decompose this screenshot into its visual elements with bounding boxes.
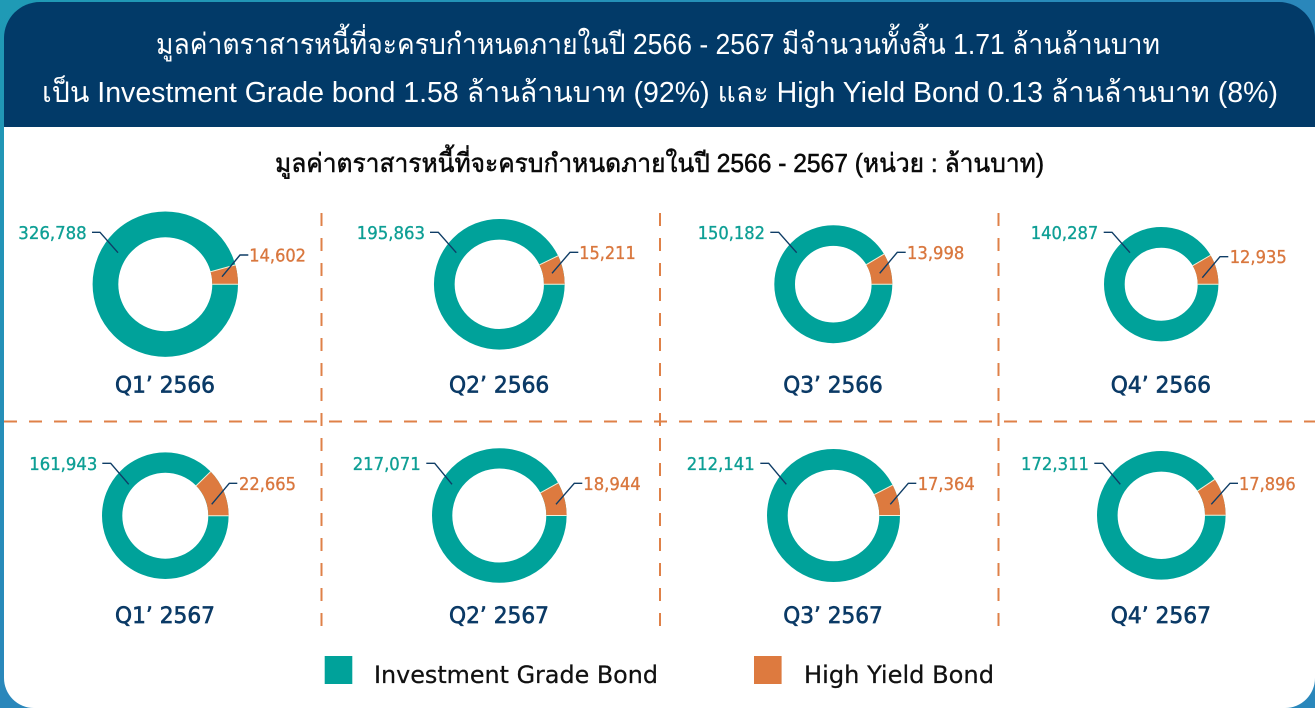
donut chart: Q3 2567 xyxy=(687,440,975,629)
donut chart: Q1 2567 xyxy=(29,441,296,629)
legend label: high yield: High Yield Bond xyxy=(804,661,994,689)
donut chart: Q1 2566 xyxy=(18,211,306,399)
value: high yield: 15,211 xyxy=(579,244,636,264)
ring xyxy=(422,438,577,593)
value: high yield: 17,364 xyxy=(918,475,975,495)
legend xyxy=(325,656,994,689)
quarter label: Q1’ 2567 xyxy=(115,603,215,629)
value: investment grade: 140,287 xyxy=(1031,224,1098,244)
ring xyxy=(90,441,240,591)
legend swatch: high yield xyxy=(754,656,782,684)
legend label: investment grade: Investment Grade Bond xyxy=(374,661,658,689)
quarter label: Q1’ 2566 xyxy=(115,373,215,399)
value: investment grade: 172,311 xyxy=(1021,455,1089,475)
chart subtitle: มูลค่าตราสารหนี้ที่จะครบกำหนดภายในปี 2566 - 2567 (หน่วย : ล้านบาท) xyxy=(275,144,1044,179)
header background xyxy=(4,2,1315,127)
legend swatch: investment grade xyxy=(325,656,352,684)
donut chart: Q3 2566 xyxy=(698,218,964,399)
ring xyxy=(1097,220,1225,348)
value: high yield: 17,896 xyxy=(1239,475,1296,495)
ring xyxy=(1086,440,1236,590)
ring xyxy=(767,218,900,351)
donut chart: Q4 2567 xyxy=(1021,440,1296,629)
value: investment grade: 212,141 xyxy=(687,455,755,475)
ring xyxy=(426,211,573,358)
value: high yield: 12,935 xyxy=(1230,248,1287,268)
title line 1: มูลค่าตราสารหนี้ที่จะครบกำหนดภายในปี 2566 - 2567 มีจำนวนทั้งสิ้น 1.71 ล้านล้านบาท xyxy=(156,23,1160,62)
header banner xyxy=(4,2,1315,127)
value: high yield: 18,944 xyxy=(583,475,641,495)
title line 2: เป็น Investment Grade bond 1.58 ล้านล้านบาท (92%) และ High Yield Bond 0.13 ล้านล้านบาท (8%) xyxy=(42,74,1278,109)
value: investment grade: 326,788 xyxy=(18,224,87,244)
donut chart: Q4 2566 xyxy=(1031,220,1287,399)
quarter label: Q2’ 2566 xyxy=(449,373,549,399)
ring xyxy=(758,440,909,591)
value: high yield: 14,602 xyxy=(249,247,306,267)
value: investment grade: 161,943 xyxy=(29,455,97,475)
ring xyxy=(92,211,239,358)
quarter label: Q4’ 2567 xyxy=(1111,603,1211,629)
quarter label: Q3’ 2566 xyxy=(783,373,883,399)
value: high yield: 13,998 xyxy=(907,244,964,264)
value: high yield: 22,665 xyxy=(239,475,296,495)
quarter label: Q2’ 2567 xyxy=(449,603,549,629)
donut chart: Q2 2566 xyxy=(357,211,636,399)
value: investment grade: 150,182 xyxy=(698,224,765,244)
quarter label: Q3’ 2567 xyxy=(783,603,883,629)
value: investment grade: 195,863 xyxy=(357,224,425,244)
quarter label: Q4’ 2566 xyxy=(1111,373,1211,399)
donut chart: Q2 2567 xyxy=(353,438,641,629)
value: investment grade: 217,071 xyxy=(353,455,421,475)
